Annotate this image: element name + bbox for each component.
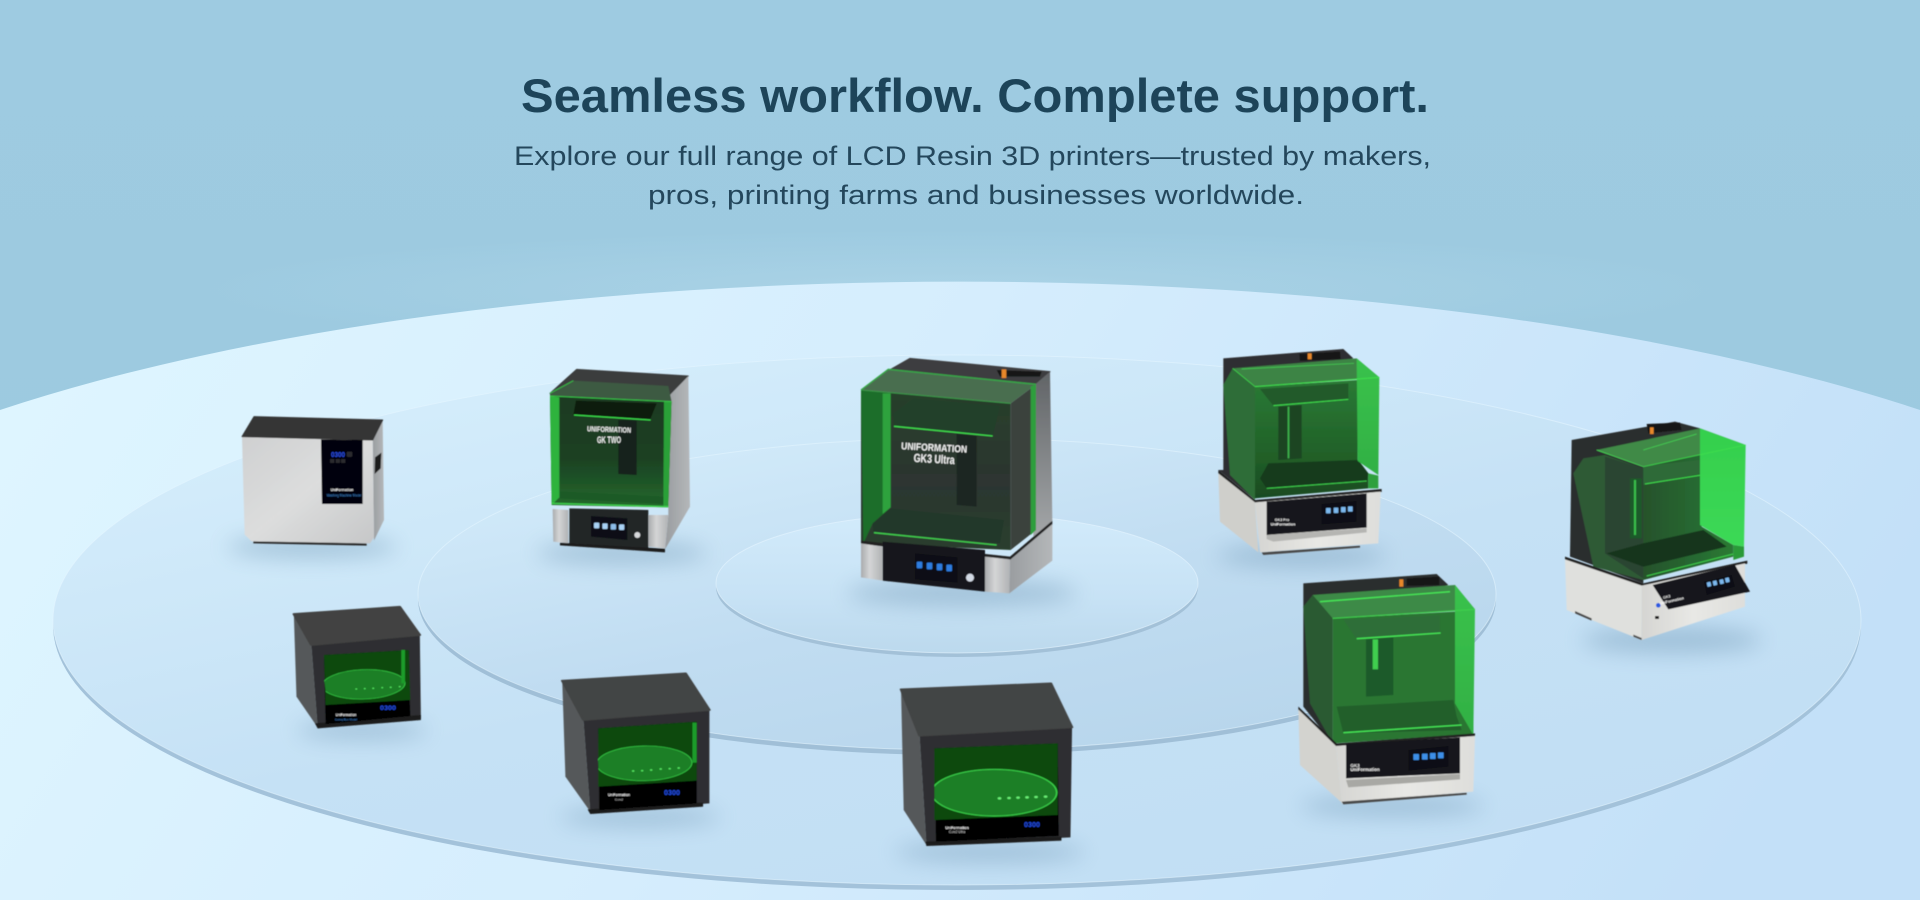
subtitle line 1: Explore our full range of LCD Resin 3D printers—trusted by makers, bbox=[514, 141, 1431, 171]
platform: inner ring bbox=[716, 513, 1198, 657]
printer: washing machine bbox=[242, 417, 384, 546]
printer: GK3 front: GK3 bbox=[1350, 763, 1360, 768]
curing box: small: UniFormation bbox=[336, 713, 356, 717]
curing box: medium: UniFormation bbox=[608, 793, 630, 797]
printer: GK3 angled panel: UniFormation bbox=[1659, 596, 1685, 606]
curing box: medium: 0300 bbox=[664, 790, 680, 797]
background glow bbox=[200, 230, 1720, 350]
printer: GK Two: UNIFORMATION bbox=[587, 424, 631, 435]
curing box: small: 0300 bbox=[380, 705, 396, 712]
curing box: medium: Cure2 bbox=[615, 798, 623, 802]
curing box: large: Cure2 Ultra bbox=[949, 830, 965, 834]
printer: GK3 Ultra: UNIFORMATION bbox=[901, 441, 967, 456]
curing box: large: 0300 bbox=[1024, 820, 1040, 829]
platform: outer dome bbox=[0, 282, 1920, 900]
printer: GK Two bbox=[550, 369, 690, 552]
printer: washing machine: Washing Machine Model bbox=[327, 494, 362, 498]
printer: GK3 angled panel bbox=[1565, 422, 1750, 640]
printer: GK3 Pro: GK3 Pro bbox=[1275, 518, 1290, 522]
printer: GK3 Ultra: GK3 Ultra bbox=[913, 451, 955, 467]
curing box: medium bbox=[562, 673, 709, 814]
platform: outer ring bbox=[53, 355, 1861, 890]
printer: GK3 front bbox=[1298, 574, 1475, 804]
subtitle line 2: pros, printing farms and businesses worldwide. bbox=[648, 180, 1304, 210]
printer: washing machine: UniFormation bbox=[331, 488, 353, 492]
curing box: small bbox=[294, 607, 421, 728]
printer: washing machine: 0300 bbox=[331, 452, 345, 459]
printer: GK3 Ultra bbox=[861, 358, 1052, 593]
printer: GK3 angled panel: GK3 bbox=[1663, 594, 1671, 600]
platform: middle ring bbox=[418, 438, 1496, 755]
printer: GK3 front: UniFormation bbox=[1350, 767, 1380, 772]
title: Seamless workflow. Complete support. bbox=[521, 69, 1429, 122]
curing box: large bbox=[901, 683, 1072, 846]
printer: GK3 Pro bbox=[1218, 349, 1382, 555]
printer: GK3 Pro: UniFormation bbox=[1271, 522, 1296, 526]
floor shadows under machines bbox=[227, 536, 1762, 862]
curing box: small: Curing Box Model bbox=[335, 718, 357, 722]
curing box: large: UniFormation bbox=[945, 826, 969, 830]
printer: GK Two: GK TWO bbox=[597, 435, 621, 445]
